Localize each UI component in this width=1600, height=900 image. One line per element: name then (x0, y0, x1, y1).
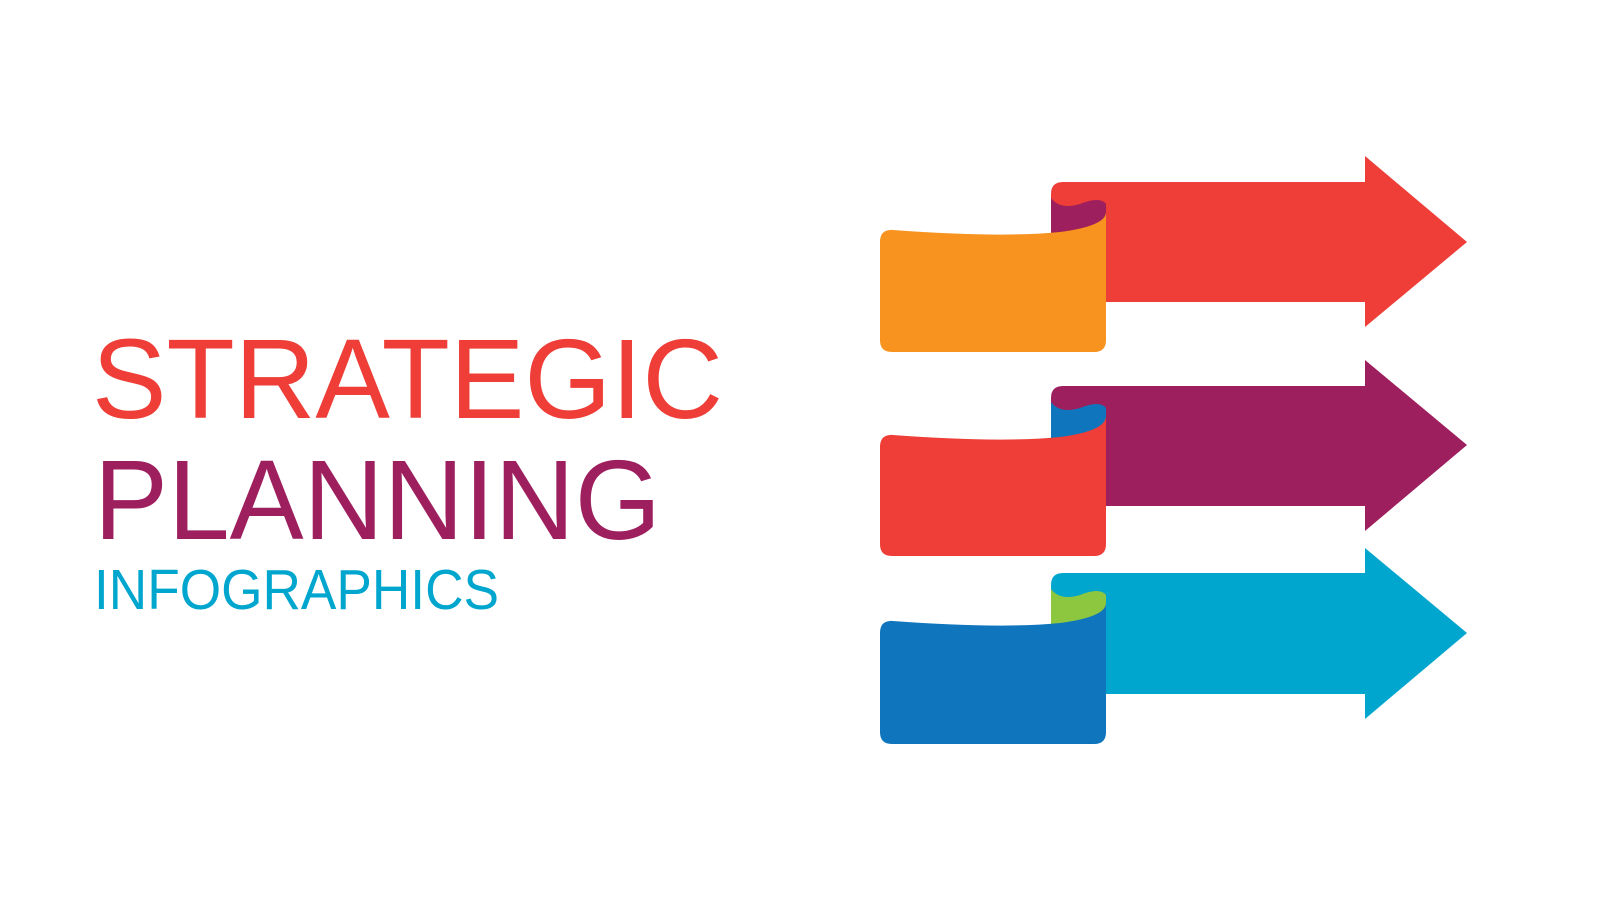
arrow 2 with red ribbon (880, 360, 1467, 556)
title: strategic planning: STRATEGIC (92, 316, 723, 442)
title: strategic planning (92, 316, 723, 563)
title: strategic planning: PLANNING (94, 437, 661, 563)
arrow 3 with blue ribbon (880, 548, 1467, 744)
subtitle: INFOGRAPHICS (94, 558, 499, 622)
arrow 1 with orange ribbon (880, 156, 1467, 352)
